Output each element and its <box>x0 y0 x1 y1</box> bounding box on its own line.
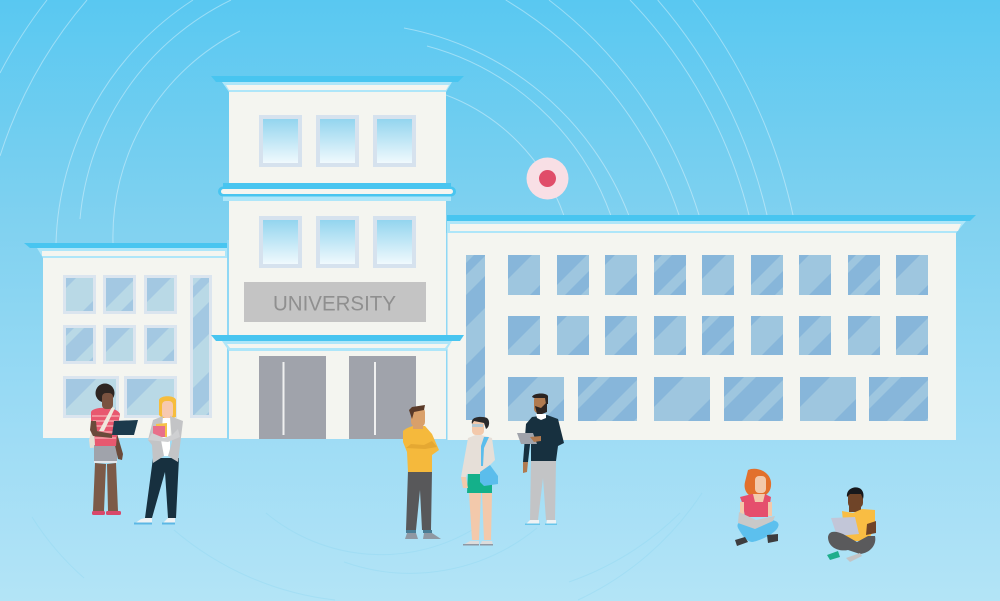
right wing roof <box>447 215 976 233</box>
location marker <box>526 158 568 200</box>
person: man sitting with laptop <box>827 487 876 562</box>
upper windows <box>261 117 414 165</box>
entrance doors <box>259 356 416 439</box>
person: woman with striped shirt and laptop <box>89 384 138 515</box>
left wing windows <box>63 275 387 601</box>
left wing building <box>24 243 387 601</box>
central tower <box>211 76 464 439</box>
person: man in yellow sweater <box>403 405 441 539</box>
left wing roof <box>24 243 228 258</box>
right wing wall edge <box>446 233 448 440</box>
left wing wall <box>43 258 228 438</box>
right wing building <box>446 215 1000 601</box>
right wing windows <box>466 255 1000 601</box>
tower middle ledge <box>218 183 456 201</box>
person: woman in green skirt with blue bag <box>461 417 498 546</box>
tower wall <box>229 92 446 439</box>
person: blonde woman holding books <box>134 396 183 524</box>
university sign <box>244 282 426 322</box>
person: red-haired woman sitting with book <box>735 469 779 546</box>
tower lower outline <box>227 240 229 439</box>
person: bearded man with tablet <box>517 393 564 525</box>
sky signal arcs <box>0 0 793 243</box>
right wing wall <box>447 233 956 440</box>
entrance canopy <box>211 335 464 351</box>
ground signal arcs <box>32 493 702 600</box>
tower roof <box>211 76 464 92</box>
lower windows <box>261 218 414 266</box>
university sign: UNIVERSITY <box>273 292 396 316</box>
